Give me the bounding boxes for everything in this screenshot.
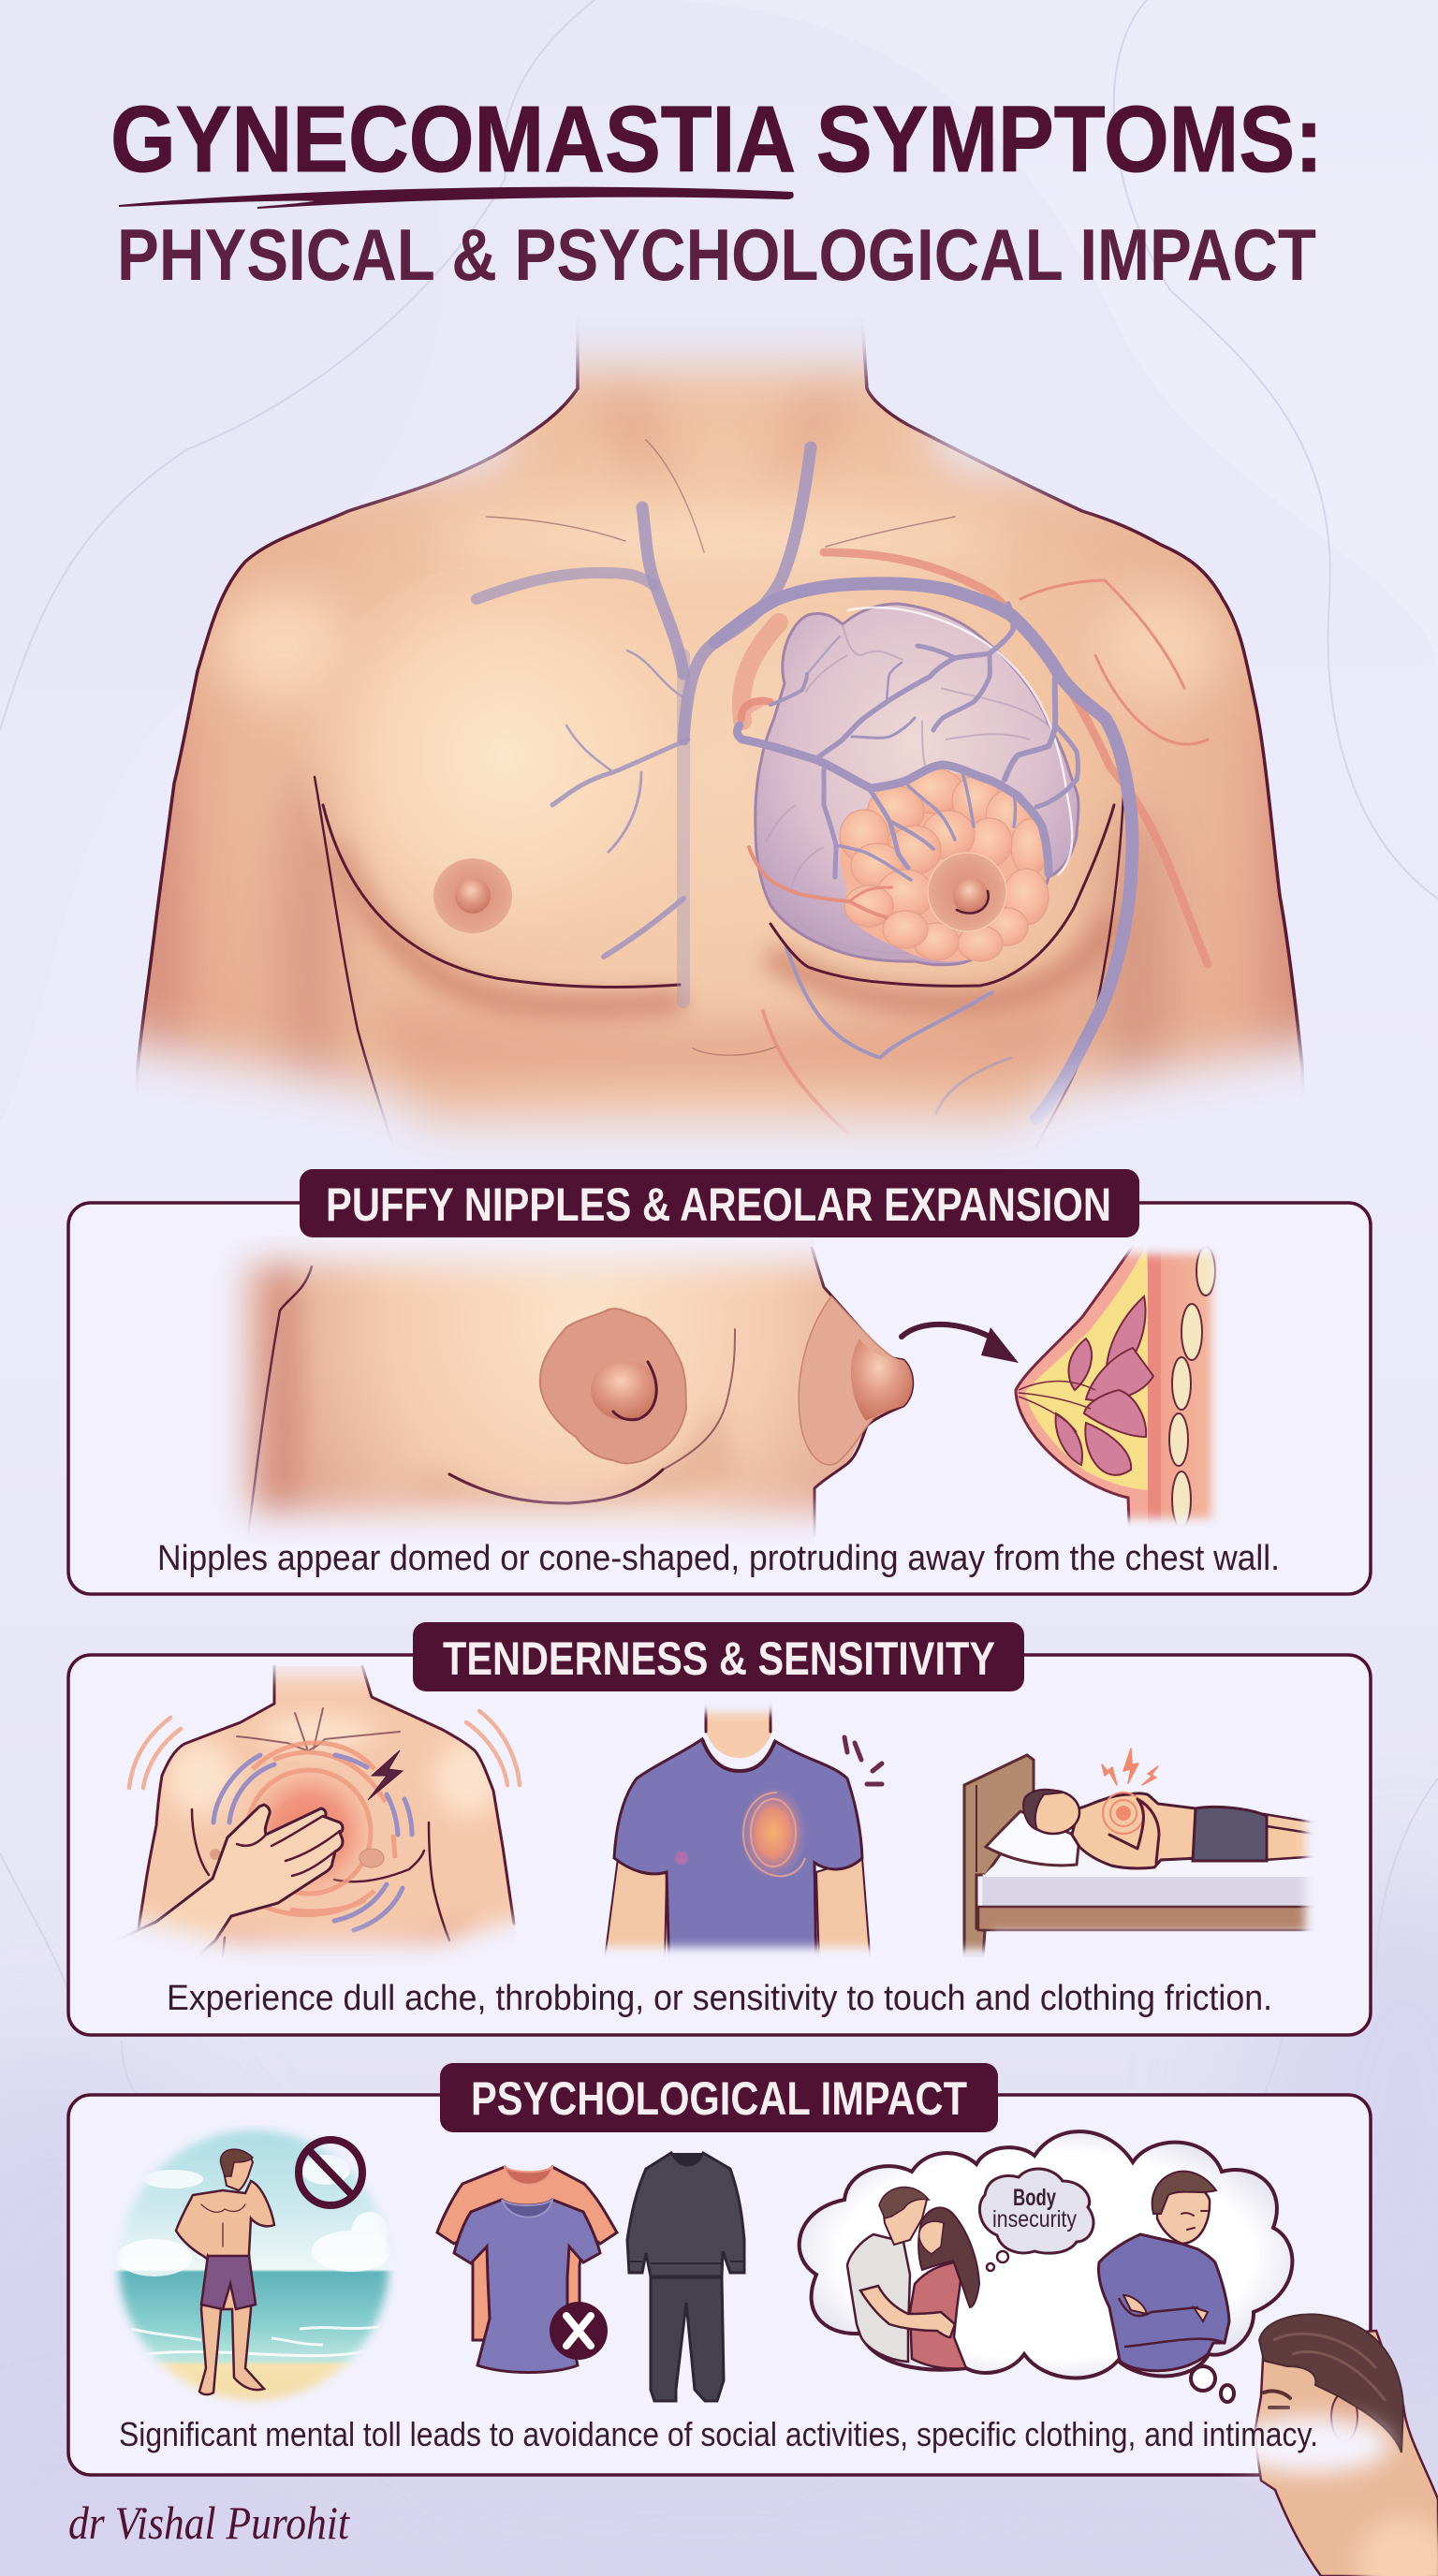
panel heading pill: PUFFY NIPPLES & AREOLAR EXPANSION: [326, 1178, 1111, 1231]
vibration arcs left: [129, 1718, 181, 1788]
breast fold: [449, 1470, 663, 1503]
lower breast artery: [749, 847, 892, 917]
clouds: [117, 2155, 390, 2276]
mattress: [983, 1875, 1320, 1906]
arms: [604, 1858, 667, 1966]
left pectoral veins: [552, 651, 688, 1002]
waves: [131, 2327, 379, 2356]
right nipple and areola: [928, 853, 1006, 931]
ducts: [1019, 1382, 1095, 1432]
breast veins: [715, 583, 1132, 1119]
beach scene: [103, 2125, 412, 2420]
front areola: [540, 1309, 686, 1463]
signature: dr Vishal Purohit: [68, 2496, 350, 2549]
vibration arcs right: [466, 1711, 520, 1785]
x badge: [550, 2302, 608, 2360]
nipple spot: [675, 1852, 688, 1865]
sad man face: [1181, 2211, 1208, 2230]
title line 1: GYNECOMASTIA SYMPTOMS:: [110, 87, 1323, 192]
hand: [112, 1805, 343, 1966]
fat layer: [1025, 1245, 1157, 1490]
torso with hand: [112, 1666, 515, 1975]
man on beach: [176, 2149, 274, 2394]
sad man hair: [1152, 2172, 1216, 2214]
irritation marks: [844, 1737, 882, 1784]
chest contour: [812, 1248, 913, 1535]
headboard: [964, 1755, 1034, 1956]
bed frame: [978, 1907, 1320, 1930]
arm across chest: [1109, 1799, 1159, 1863]
shoulder shading: [1357, 2518, 1438, 2576]
orange collar: [505, 2167, 552, 2185]
panel frame: [68, 2095, 1371, 2475]
chest skin: [187, 1236, 913, 1544]
head: [222, 2152, 253, 2190]
couple embrace: [847, 2188, 979, 2369]
left pectoral highlight: [318, 597, 633, 912]
woman hair: [918, 2207, 979, 2307]
hair: [1023, 1790, 1063, 1830]
central and collar veins: [477, 447, 811, 739]
woman dress: [910, 2262, 966, 2369]
panel: puffy nipples: [68, 1169, 1371, 1594]
muscle strip: [1148, 1240, 1170, 1544]
rib strip: [1161, 1240, 1225, 1549]
small thought cloud: insecurity: [992, 2206, 1077, 2232]
panel heading pill: PSYCHOLOGICAL IMPACT: [471, 2072, 967, 2125]
glandular breast tissue: [756, 604, 1078, 965]
small thought cloud: Body: [1013, 2185, 1056, 2211]
bed with lying man: [964, 1749, 1320, 1956]
sad man hands: [1123, 2295, 1208, 2321]
outline: [139, 1666, 274, 1928]
psychological caption: Significant mental toll leads to avoidance of social activities, specific clothing, and intimacy.: [119, 2415, 1318, 2453]
man profile head, corner: [1231, 2314, 1438, 2576]
breast arteries: [741, 552, 1208, 1133]
caption fade over face: [1231, 2417, 1390, 2473]
dark pants: [651, 2277, 724, 2401]
title underline swash: [119, 188, 793, 208]
arm creases: [192, 1809, 449, 1956]
head and neck skin: [1255, 2331, 1438, 2576]
hair strands: [1273, 2334, 1386, 2401]
panel frame: [68, 1203, 1371, 1594]
man hair: [879, 2188, 929, 2218]
side areola: [799, 1296, 909, 1465]
inner thought bubbles: [987, 2251, 1008, 2271]
arm and muscle lines: [315, 440, 1123, 1151]
chest pain rings: [1103, 1793, 1144, 1834]
purple collar: [502, 2200, 552, 2217]
torso anatomy illustration: [128, 318, 1323, 1179]
hair: [1259, 2314, 1403, 2452]
man in white tee: [847, 2234, 910, 2362]
shorts: [1193, 1807, 1267, 1861]
left nipple and areola: [433, 858, 512, 933]
pillow: [986, 1811, 1079, 1866]
nipples: [360, 1849, 384, 1867]
panel caption: Experience dull ache, throbbing, or sensitivity to touch and clothing friction.: [167, 1979, 1272, 2018]
arrow: [902, 1325, 1019, 1363]
hem: [629, 2261, 744, 2263]
gland pale rim: [847, 607, 1072, 875]
hair: [221, 2149, 253, 2176]
finger lines: [237, 1816, 340, 1876]
shadow under pectorals: [337, 842, 1114, 1006]
lobule base: [841, 772, 1047, 961]
breast cross-section: [1016, 1236, 1225, 1549]
shirt rings: [743, 1793, 805, 1876]
side nipple: [851, 1339, 913, 1421]
orange t-shirt: [437, 2167, 617, 2340]
prohibition sign: [299, 2140, 362, 2205]
panel heading pill: [300, 1169, 1139, 1237]
chest illustration with puffy nipple: [187, 1226, 913, 1544]
sad man: [1098, 2172, 1229, 2371]
shorts: [201, 2256, 256, 2309]
panel frame: [68, 1655, 1371, 2035]
man body skin: [176, 2181, 274, 2394]
lightning bolt: [368, 1750, 403, 1800]
front nipple: [591, 1360, 658, 1420]
purple pain arcs: [213, 1755, 412, 1930]
ribs: [1169, 1247, 1215, 1528]
outer thought bubbles: [1191, 2366, 1234, 2402]
dark sweatshirt: [627, 2153, 744, 2276]
man head: [882, 2188, 927, 2245]
woman face: [919, 2221, 944, 2254]
pain glow: [242, 1764, 376, 1899]
torso skin: [138, 318, 1302, 1179]
sad man sweater: [1098, 2234, 1229, 2371]
man head: [1027, 1791, 1079, 1834]
collar lines: [237, 1708, 400, 1750]
title: [110, 87, 1323, 296]
shirt glow: [740, 1786, 807, 1880]
right pectoral outline: [770, 805, 1114, 986]
man body: [1072, 1793, 1198, 1868]
small thought cloud: [979, 2169, 1093, 2253]
bed pain bolts: [1102, 1749, 1158, 1785]
torso skin: [139, 1666, 515, 1975]
collar: [702, 1739, 775, 1771]
shading: neck, shoulders and arms: [128, 374, 1323, 1123]
panel caption: Nipples appear domed or cone-shaped, protruding away from the chest wall.: [157, 1539, 1280, 1578]
collar: [671, 2153, 703, 2166]
gland faint internal lines: [766, 624, 1049, 889]
torso lines: [201, 2204, 245, 2247]
embracing arm: [860, 2286, 955, 2337]
lobules: [1056, 1296, 1153, 1475]
man legs: [1264, 1814, 1320, 1860]
sad man head: [1157, 2186, 1210, 2244]
ear: [1331, 2393, 1357, 2441]
outer torso outline: [136, 318, 578, 1142]
pain rings: [247, 1743, 395, 1915]
panel: psychological impact: [68, 2063, 1371, 2475]
left pectoral underline: [323, 805, 680, 987]
brow and eye: [1264, 2391, 1290, 2408]
sad man crossed arms: [1119, 2298, 1225, 2347]
milk lobules: [840, 768, 1049, 961]
panel heading pill: [413, 1622, 1024, 1691]
torso shading: [434, 1741, 502, 1816]
thought cloud: [800, 2131, 1292, 2378]
panel: tenderness: [68, 1622, 1371, 2035]
purple t-shirt: [454, 2200, 600, 2372]
panel heading pill: TENDERNESS & SENSITIVITY: [443, 1632, 995, 1685]
t-shirt figure: [604, 1699, 871, 1975]
panel heading pill: [440, 2063, 998, 2132]
shirt: [614, 1739, 862, 1975]
neck: [706, 1699, 772, 1758]
